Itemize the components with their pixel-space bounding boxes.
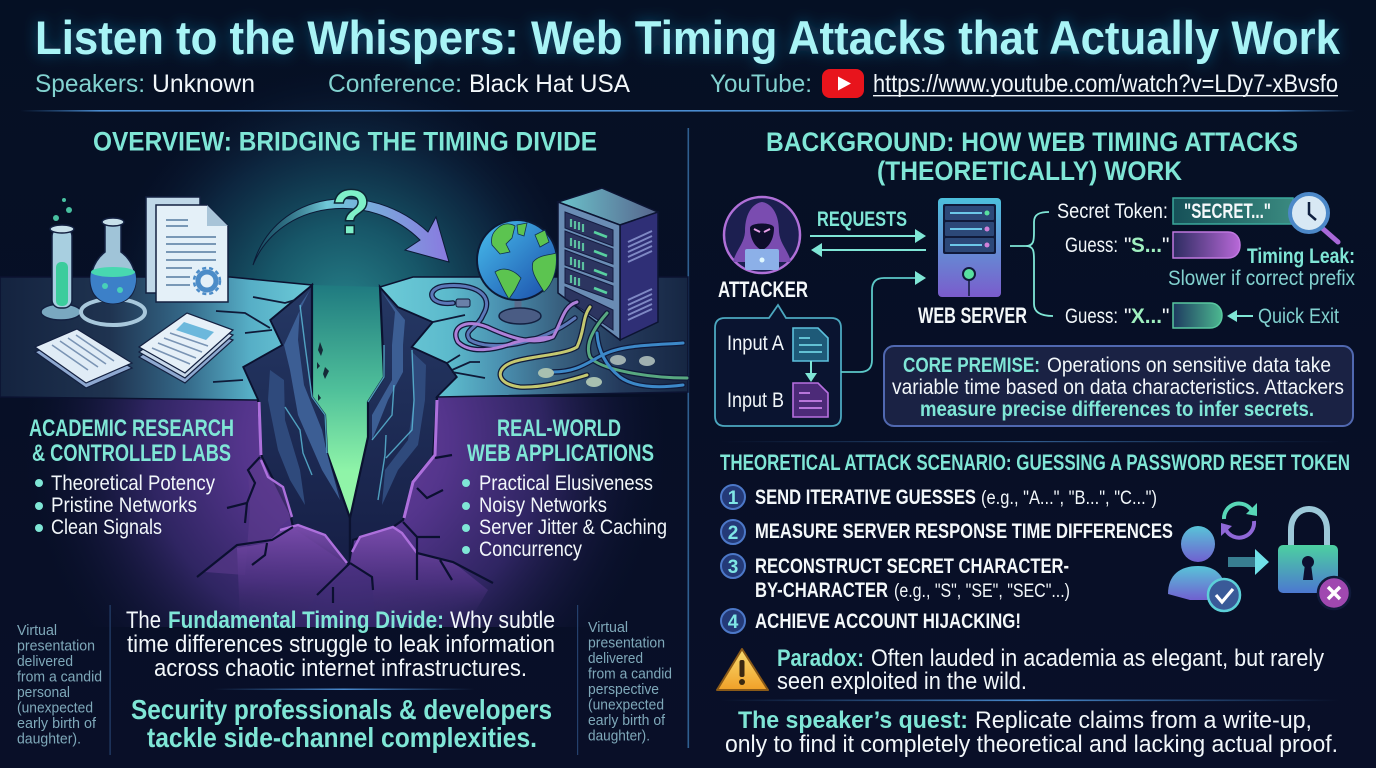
note: right side: (unexpected <box>588 698 664 714</box>
chasm glow <box>312 285 384 518</box>
callout: core premise <box>884 346 1353 426</box>
text: paradox: seen exploited in the wild. <box>777 668 1027 695</box>
note: right side: from a candid <box>588 666 672 682</box>
note: left side: (unexpected <box>17 700 93 716</box>
step 4: ACHIEVE ACCOUNT HIJACKING! <box>755 610 1021 633</box>
callout: timing leak <box>1168 245 1355 290</box>
metadata row <box>35 69 1338 98</box>
note: left side: from a candid <box>17 670 102 686</box>
arrow: quick exit: Quick Exit <box>1258 305 1339 328</box>
callout: core premise: variable time based on data characteristics. Attackers <box>892 376 1344 399</box>
icon: certificate document <box>146 197 228 302</box>
text: speaker quest <box>725 707 1338 758</box>
speakers <box>35 70 255 98</box>
heading: background <box>766 127 1298 186</box>
label: real world <box>467 415 654 467</box>
arrow: quick exit <box>1227 305 1339 328</box>
conference: Conference: <box>328 70 462 98</box>
row: guess X: Guess: <box>1065 305 1118 328</box>
icon: account hijack <box>1168 503 1350 611</box>
row: guess S: S... <box>1131 234 1162 257</box>
conference: Black Hat USA <box>469 70 630 98</box>
row: guess X: " <box>1124 305 1131 328</box>
row: guess S: " <box>1162 234 1169 257</box>
note: left side <box>17 623 102 748</box>
icon: web server <box>938 198 1001 297</box>
text: fundamental timing divide: across chaotic internet infrastructures. <box>154 655 527 682</box>
list: real world: Noisy Networks <box>479 494 607 517</box>
icon: document A <box>793 328 828 361</box>
icon: globe <box>477 220 557 324</box>
text: audience: Security professionals & developers <box>131 694 552 725</box>
list: academic: Theoretical Potency <box>51 472 215 495</box>
arrows: requests and responses <box>810 229 926 257</box>
text: audience: tackle side-channel complexities. <box>147 722 537 753</box>
illustration: timing divide chasm <box>0 176 688 627</box>
icon: document B <box>793 383 828 417</box>
icon: lock <box>1278 509 1350 609</box>
label: real world: REAL-WORLD <box>497 415 621 442</box>
box: inputs <box>715 305 841 426</box>
step 1: SEND ITERATIVE GUESSES <box>755 486 976 509</box>
box: inputs: Input A <box>727 332 784 355</box>
step 3: 3 <box>728 557 738 578</box>
text: fundamental timing divide: time differences struggle to leak information <box>127 631 555 658</box>
icon: attacker <box>724 197 800 273</box>
step 1 <box>721 485 1157 509</box>
icon: test tube <box>41 198 81 320</box>
icon: flask <box>81 218 145 325</box>
text: paradox: Paradox: <box>777 645 864 672</box>
step 4: 4 <box>728 612 739 633</box>
note: right side: perspective <box>588 682 659 698</box>
step 3 <box>721 554 1070 602</box>
heading: overview: OVERVIEW: BRIDGING THE TIMING DIVIDE <box>93 126 597 156</box>
row: guess S <box>1065 232 1240 258</box>
purple wedge left <box>205 460 292 575</box>
purple chunk right <box>350 527 488 620</box>
list: real world: Practical Elusiveness <box>479 472 653 495</box>
list: academic: Pristine Networks <box>51 494 197 517</box>
row: guess X: X... <box>1131 305 1162 328</box>
heading: background: BACKGROUND: HOW WEB TIMING ATTACKS <box>766 127 1298 157</box>
youtube label: YouTube: <box>710 70 812 98</box>
icon: papers right <box>139 313 233 383</box>
heading: background: (THEORETICALLY) WORK <box>877 156 1182 186</box>
note: right side: early birth of <box>588 713 666 729</box>
box: inputs: Input B <box>727 389 784 412</box>
label: attacker: ATTACKER <box>718 277 808 302</box>
text: fundamental timing divide: Why subtle <box>450 607 555 634</box>
callout: core premise: CORE PREMISE: <box>903 354 1040 377</box>
text: fundamental timing divide: Fundamental Timing Divide: <box>168 607 444 634</box>
row: guess X: " <box>1162 305 1169 328</box>
note: right side: Virtual <box>588 620 628 636</box>
step 3: BY-CHARACTER <box>755 579 888 602</box>
speakers: Speakers: <box>35 70 145 98</box>
brace: token comparison <box>1010 212 1053 316</box>
callout: timing leak: Timing Leak: <box>1247 245 1355 268</box>
list: real world <box>462 472 667 561</box>
note: right side <box>588 620 672 744</box>
row: guess S: Guess: <box>1065 234 1118 257</box>
conference <box>328 70 630 98</box>
icon: question arrow: ? <box>331 176 371 248</box>
icon: user <box>1168 526 1240 611</box>
step 2: 2 <box>728 523 738 544</box>
arrow: to lock <box>1228 549 1269 575</box>
arrow: inputs to server <box>841 271 926 372</box>
icon: server rack <box>558 188 658 340</box>
panel: background <box>715 127 1355 758</box>
callout: core premise: Operations on sensitive data take <box>1047 354 1331 377</box>
note: right side: delivered <box>588 651 643 667</box>
rock wall left <box>243 285 350 563</box>
text: paradox: Often lauded in academia as elegant, but rarely <box>871 645 1324 672</box>
step 1: (e.g., "A...", "B...", "C...") <box>981 488 1157 509</box>
icon: tangled cables <box>432 286 687 387</box>
row: secret token: "SECRET..." <box>1184 200 1271 223</box>
cracks <box>197 455 493 603</box>
step 3: RECONSTRUCT SECRET CHARACTER- <box>755 555 1069 578</box>
note: right side: presentation <box>588 636 665 652</box>
purple chunk left <box>237 525 347 620</box>
panel: overview <box>0 126 688 755</box>
row: secret token: Secret Token: <box>1057 200 1168 223</box>
note: right side: daughter). <box>588 728 650 744</box>
step 3: (e.g., "S", "SE", "SEC"...) <box>894 581 1070 602</box>
note: left side: delivered <box>17 654 73 670</box>
platform: real world side <box>380 277 688 397</box>
label: academic: & CONTROLLED LABS <box>32 440 231 467</box>
row: guess X <box>1065 303 1222 328</box>
row: secret token <box>1057 198 1293 224</box>
icon: clock magnifier <box>1290 194 1338 242</box>
text: speaker quest: Replicate claims from a write-up, <box>975 707 1312 734</box>
text: fundamental timing divide: The <box>126 607 161 634</box>
icon: papers left <box>35 329 132 388</box>
list: real world: Server Jitter & Caching <box>479 516 667 539</box>
icon: question arrow <box>253 176 449 265</box>
note: left side: presentation <box>17 638 95 654</box>
label: web server: WEB SERVER <box>918 303 1027 328</box>
list: attack steps <box>721 485 1173 633</box>
note: left side: Virtual <box>17 623 57 639</box>
note: left side: personal <box>17 685 70 701</box>
list: real world: Concurrency <box>479 538 582 561</box>
note: left side: daughter). <box>17 732 81 748</box>
purple rims <box>259 400 437 518</box>
icon: youtube <box>822 69 864 98</box>
text: fundamental timing divide <box>126 607 555 682</box>
step 2: MEASURE SERVER RESPONSE TIME DIFFERENCES <box>755 520 1173 543</box>
text: speaker quest: The speaker’s quest: <box>738 707 968 734</box>
platform: academic side <box>0 277 312 400</box>
text: paradox <box>777 645 1324 695</box>
list: academic <box>35 472 215 539</box>
label: academic: ACADEMIC RESEARCH <box>29 415 234 442</box>
list: academic: Clean Signals <box>51 516 162 539</box>
icon: warning <box>717 649 768 690</box>
text: audience <box>131 694 552 753</box>
label: requests: REQUESTS <box>817 208 907 231</box>
speakers: Unknown <box>152 70 255 98</box>
callout: timing leak: Slower if correct prefix <box>1168 267 1355 290</box>
row: guess S: " <box>1124 234 1131 257</box>
label: academic <box>29 415 234 467</box>
rock wall right <box>350 287 457 563</box>
note: left side: early birth of <box>17 716 97 732</box>
step 1: 1 <box>728 488 739 509</box>
callout: core premise: measure precise differences to infer secrets. <box>920 398 1314 421</box>
icon: refresh <box>1221 503 1257 538</box>
label: real world: WEB APPLICATIONS <box>467 440 654 467</box>
text: speaker quest: only to find it completely theoretical and lacking actual proof. <box>725 731 1338 758</box>
